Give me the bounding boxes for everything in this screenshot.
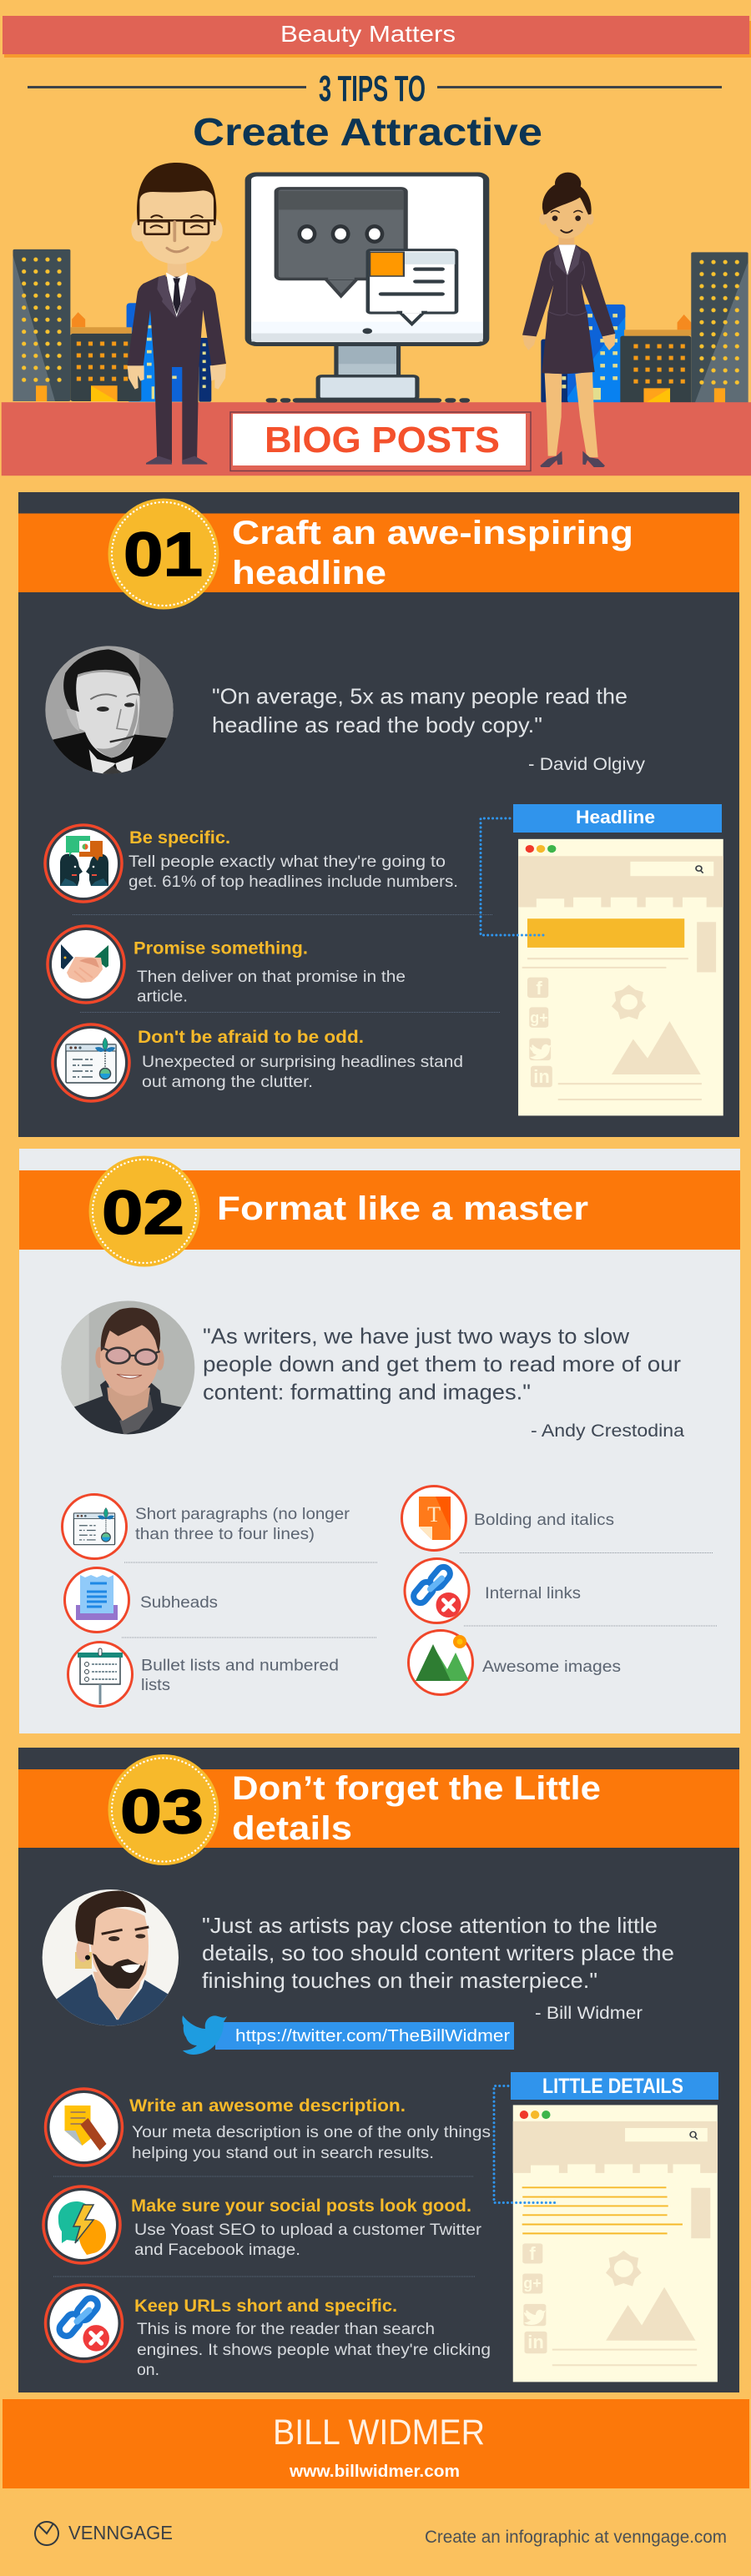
quote 02: "As writers, we have just two ways to slow: [203, 1323, 629, 1348]
text: short paragraphs: than three to four lines): [135, 1526, 315, 1543]
tip 01 heading: Craft an awe-inspiring: [232, 515, 633, 551]
text: subheads: Subheads: [140, 1594, 218, 1612]
heading: be specific: Be specific.: [129, 828, 230, 848]
item: bullet lists: [68, 1642, 339, 1707]
quote 01: "On average, 5x as many people read the: [212, 684, 628, 709]
body: social posts: Use Yoast SEO to upload a customer Twitter: [134, 2221, 482, 2239]
footer band: author: BILL WIDMER: [273, 2412, 485, 2453]
body: social posts: and Facebook image.: [134, 2241, 300, 2259]
venngage logo: VENNGAGE: [68, 2522, 173, 2543]
badge 03: 03: [120, 1777, 204, 1846]
item: subheads: [65, 1568, 218, 1632]
text: bolding and italics: Bolding and italics: [474, 1512, 614, 1529]
badge 01: 01: [123, 520, 203, 589]
twitter link: https://twitter.com/TheBillWidmer: [235, 2027, 510, 2045]
little details tag: LITTLE DETAILS: [542, 2075, 683, 2098]
woman character: [522, 173, 615, 467]
red ground band: [2, 402, 751, 475]
blue building left: [127, 303, 211, 402]
icon: handshake: [48, 926, 124, 1003]
tip 03 heading: [232, 1770, 601, 1847]
blog posts label: BlOG POSTS: [265, 420, 500, 460]
heading: promise something: Promise something.: [134, 939, 308, 958]
body: promise something: [137, 969, 406, 1006]
badge 01: [108, 499, 219, 609]
tip 01 heading: headline: [232, 555, 386, 591]
badge 03: [108, 1754, 219, 1865]
browser mockup: headline: f: [536, 978, 542, 999]
quote 02: [203, 1323, 684, 1441]
tip 03 heading: details: [232, 1810, 352, 1847]
icon: twitter bird: [182, 2015, 227, 2055]
browser mockup: headline: in: [533, 1066, 550, 1087]
tip 03 orange header bar: [18, 1769, 739, 1848]
body: be specific: get. 61% of top headlines include numbers.: [129, 873, 458, 891]
tip 01 item: be specific: [45, 825, 458, 902]
body: promise something: Then deliver on that promise in the: [137, 969, 406, 986]
tip 01 orange header bar: [18, 514, 739, 592]
icon: broken link: [405, 1558, 469, 1623]
browser mockup: little details: g+: [523, 2275, 542, 2292]
blog posts label: [230, 412, 531, 470]
text: short paragraphs: [135, 1506, 350, 1543]
header illustration: [2, 174, 751, 475]
panel: tip 01: [18, 492, 739, 1137]
browser mockup: little details: in: [527, 2332, 544, 2352]
tip 03 item: description: [45, 2089, 491, 2166]
browser mockup: little details: f: [529, 2243, 536, 2264]
quote 01: [212, 684, 646, 774]
top ribbon: Beauty Matters: [3, 16, 751, 58]
icon: T document: [402, 1487, 466, 1550]
quote 01: headline as read the body copy.": [212, 712, 542, 737]
dotted connector: little details: [494, 2085, 557, 2202]
text: short paragraphs: Short paragraphs (no longer: [135, 1506, 350, 1523]
icon: chat bubbles with bolt: [43, 2186, 120, 2263]
body: short urls: engines. It shows people what they're clicking: [137, 2342, 491, 2359]
item: awesome images: [409, 1630, 621, 1695]
text: bullet lists: lists: [141, 1677, 170, 1694]
man character: [128, 163, 226, 465]
footer credit: Create an infographic at venngage.com: [425, 2528, 727, 2547]
icon: faces with chat bubbles: [45, 825, 122, 902]
city buildings left: [13, 249, 141, 401]
portrait: David Ogilvy: [45, 646, 174, 774]
item: bolding and italics: [402, 1487, 614, 1550]
icon: T document: T: [427, 1502, 441, 1527]
text: bullet lists: [141, 1657, 339, 1694]
little details tag: [511, 2072, 718, 2100]
body: be odd: [142, 1054, 463, 1091]
quote 02: content: formatting and images.": [203, 1380, 531, 1405]
quote 03: - Bill Widmer: [535, 2004, 643, 2023]
heading: short urls: Keep URLs short and specific.: [134, 2297, 397, 2316]
title: 3 tips to: 3 TIPS TO: [319, 68, 426, 109]
body: be specific: Tell people exactly what they're going to: [129, 853, 446, 871]
monitor: [248, 174, 486, 400]
panel: tip 03: [18, 1748, 739, 2392]
heading: description: Write an awesome description.: [129, 2096, 406, 2116]
tip 02 orange header bar: [19, 1170, 740, 1250]
icon: browser sprout: [53, 1024, 129, 1101]
tip 03 heading: Don’t forget the Little: [232, 1770, 601, 1807]
browser mockup: headline: g+: [530, 1009, 548, 1026]
title: create attractive: Create Attractive: [193, 110, 542, 153]
heading: be odd: Don't be afraid to be odd.: [138, 1028, 364, 1047]
city buildings right: [620, 252, 748, 404]
text: bullet lists: Bullet lists and numbered: [141, 1657, 339, 1675]
icon: browser sprout: [62, 1495, 127, 1558]
item: internal links: [405, 1558, 581, 1623]
quote 03: finishing touches on their masterpiece.": [202, 1968, 597, 1993]
body: be odd: Unexpected or surprising headlines stand: [142, 1054, 463, 1071]
quote 03: details, so too should content writers place the: [202, 1940, 674, 1965]
panel: tip 02: [19, 1149, 740, 1733]
twitter link: [182, 2015, 514, 2055]
heading: social posts: Make sure your social posts look good.: [131, 2196, 471, 2216]
quote 02: - Andy Crestodina: [531, 1421, 684, 1441]
footer band: author: [3, 2399, 749, 2488]
body: description: Your meta description is one of the only things: [132, 2124, 491, 2141]
quote 03: "Just as artists pay close attention to the little: [202, 1913, 658, 1938]
body: short urls: [137, 2321, 491, 2379]
body: short urls: on.: [137, 2362, 159, 2379]
tip 01 item: be odd: [53, 1024, 463, 1101]
body: promise something: article.: [137, 988, 188, 1006]
tip 03 item: social posts: [43, 2186, 482, 2263]
badge 02: [88, 1156, 200, 1266]
quote 03: [202, 1913, 674, 2023]
quote 01: - David Olgivy: [528, 755, 646, 774]
icon: broken link: [45, 2285, 122, 2362]
quote 02: people down and get them to read more of our: [203, 1351, 681, 1376]
badge 02: 02: [102, 1178, 184, 1247]
icon: presentation board: [68, 1642, 132, 1707]
portrait: Andy Crestodina: [58, 1299, 198, 1437]
item: short paragraphs: [62, 1495, 350, 1558]
browser mockup: little details: [513, 2105, 718, 2382]
top ribbon: Beauty Matters: Beauty Matters: [280, 21, 456, 47]
body: social posts: [134, 2221, 482, 2259]
browser mockup: headline: [518, 839, 723, 1115]
body: description: [132, 2124, 491, 2162]
headline tag: [513, 804, 722, 833]
dotted connector: headline: [481, 818, 544, 935]
body: be odd: out among the clutter.: [142, 1074, 313, 1091]
tip 01 heading: [232, 515, 633, 591]
blue building right: [541, 304, 625, 403]
text: awesome images: Awesome images: [482, 1658, 621, 1676]
icon: note and pencil: [45, 2089, 122, 2166]
tip 02 heading: Format like a master: [217, 1190, 588, 1227]
portrait: Bill Widmer: [42, 1888, 181, 2027]
body: be specific: [129, 853, 458, 891]
text: internal links: Internal links: [485, 1585, 581, 1602]
tip 03 item: short urls: [45, 2285, 491, 2379]
icon: mountains: [409, 1630, 472, 1695]
venngage logo: [35, 2522, 173, 2545]
footer band: author: www.billwidmer.com: [289, 2463, 460, 2481]
headline tag: Headline: [576, 807, 655, 828]
tip 01 item: promise something: [48, 926, 406, 1006]
body: short urls: This is more for the reader than search: [137, 2321, 435, 2338]
icon: document: [65, 1568, 129, 1632]
body: description: helping you stand out in search results.: [132, 2145, 434, 2162]
